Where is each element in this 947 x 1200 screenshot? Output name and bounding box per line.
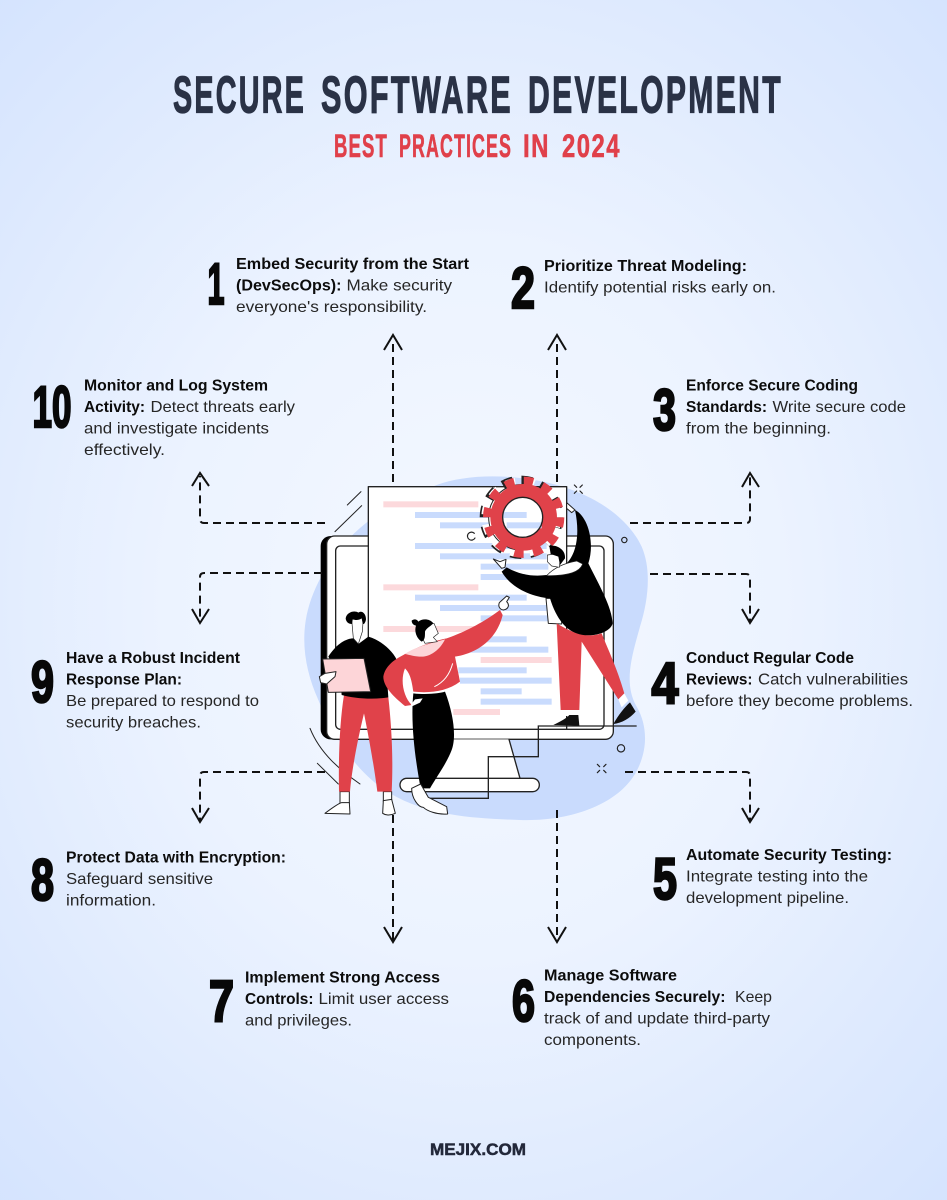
- step 5 text: Integrate testing into the: [686, 868, 868, 886]
- step 10 text: and investigate incidents: [84, 420, 269, 438]
- step 3: [653, 378, 910, 443]
- step 6 text: Keep: [735, 989, 772, 1006]
- step 8 text: information.: [66, 892, 156, 910]
- step 5 text: development pipeline.: [686, 890, 849, 907]
- step 1 text: Embed Security from the Start: [236, 256, 470, 273]
- number 5: 5: [653, 847, 677, 912]
- arrow: to step 9: [192, 573, 322, 623]
- step 10 text: effectively.: [84, 442, 165, 459]
- number 4: 4: [652, 651, 678, 716]
- step 3 text: Enforce Secure Coding: [686, 378, 858, 394]
- deco dots and sparkles: [467, 485, 627, 773]
- step 7: [209, 969, 453, 1034]
- blue blob: [304, 476, 648, 820]
- step 3 text: from the beginning.: [686, 420, 831, 438]
- step 4: [652, 650, 913, 716]
- arrow: to step 3: [630, 473, 759, 523]
- arrow: to step 10: [192, 473, 325, 523]
- step 10 text: Detect threats early: [150, 399, 295, 416]
- step 6 text: Manage Software: [544, 968, 677, 984]
- step 7 text: Limit user access: [318, 991, 449, 1008]
- number 8: 8: [31, 848, 54, 913]
- step 9 text: Be prepared to respond to: [66, 693, 259, 710]
- person: man with tablet: [319, 611, 398, 815]
- step 4 text: before they become problems.: [686, 693, 913, 710]
- step 4 text: Reviews:: [686, 672, 752, 688]
- number 1: 1: [208, 252, 224, 317]
- arrow: to step 8: [192, 772, 325, 822]
- step 9 text: security breaches.: [66, 714, 201, 732]
- step 3 text: Standards:: [686, 399, 767, 416]
- step 9 text: Have a Robust Incident: [66, 650, 241, 667]
- arrow: to step 4: [650, 574, 759, 623]
- deco lines: [310, 492, 362, 784]
- step 5: [653, 847, 896, 912]
- arrow: to step 5: [625, 772, 759, 822]
- stair line: [430, 726, 637, 798]
- step 8: [31, 848, 290, 913]
- person: man with gear: [493, 503, 636, 726]
- step 9 text: Response Plan:: [66, 672, 182, 688]
- step 7 text: Controls:: [245, 991, 314, 1008]
- step 6: [512, 968, 776, 1049]
- number 7: 7: [209, 969, 234, 1034]
- title: SECURE: [173, 66, 306, 124]
- step 1 text: everyone's responsibility.: [236, 299, 427, 316]
- step 2 text: Prioritize Threat Modeling:: [544, 258, 747, 275]
- step 7 text: and privileges.: [245, 1012, 352, 1030]
- arrow: up to step 1: [384, 335, 402, 482]
- number 10: 10: [32, 375, 72, 440]
- step 10 text: Activity:: [84, 399, 145, 416]
- number 3: 3: [653, 378, 676, 443]
- person: woman pointing: [383, 596, 509, 814]
- step 10 text: Monitor and Log System: [84, 378, 268, 394]
- step 1 text: (DevSecOps):: [236, 278, 342, 294]
- step 4 text: Catch vulnerabilities: [758, 672, 908, 688]
- step 3 text: Write secure code: [772, 399, 906, 416]
- illustration: team at monitor: [304, 476, 648, 820]
- step 1: [208, 252, 473, 317]
- step 4 text: Conduct Regular Code: [686, 650, 854, 667]
- footer: MEJIX.COM: [430, 1140, 526, 1159]
- arrow: to step 6: [548, 810, 566, 942]
- step 6 text: track of and update third-party: [544, 1010, 770, 1028]
- subtitle: PRACTICES: [399, 128, 512, 164]
- step 1 text: Make security: [346, 278, 452, 294]
- subtitle: BEST: [334, 128, 388, 164]
- number 2: 2: [511, 256, 535, 321]
- step 10: [32, 375, 299, 459]
- arrow: to step 7: [384, 815, 402, 942]
- step 8 text: Safeguard sensitive: [66, 871, 213, 888]
- number 9: 9: [31, 650, 54, 715]
- title: SOFTWARE: [321, 66, 513, 124]
- step 7 text: Implement Strong Access: [245, 970, 440, 986]
- number 6: 6: [512, 969, 535, 1034]
- arrow: up to step 2: [548, 335, 566, 482]
- step 9: [31, 650, 263, 732]
- step 8 text: Protect Data with Encryption:: [66, 850, 286, 866]
- step 6 text: components.: [544, 1032, 641, 1049]
- step 2: [511, 256, 776, 321]
- subtitle: 2024: [562, 128, 621, 164]
- monitor: [321, 536, 613, 792]
- subtitle: IN: [523, 128, 550, 164]
- step 5 text: Automate Security Testing:: [686, 847, 892, 864]
- gear: [485, 481, 560, 553]
- code document: [368, 487, 567, 729]
- step 2 text: Identify potential risks early on.: [544, 280, 776, 296]
- step 6 text: Dependencies Securely:: [544, 989, 726, 1006]
